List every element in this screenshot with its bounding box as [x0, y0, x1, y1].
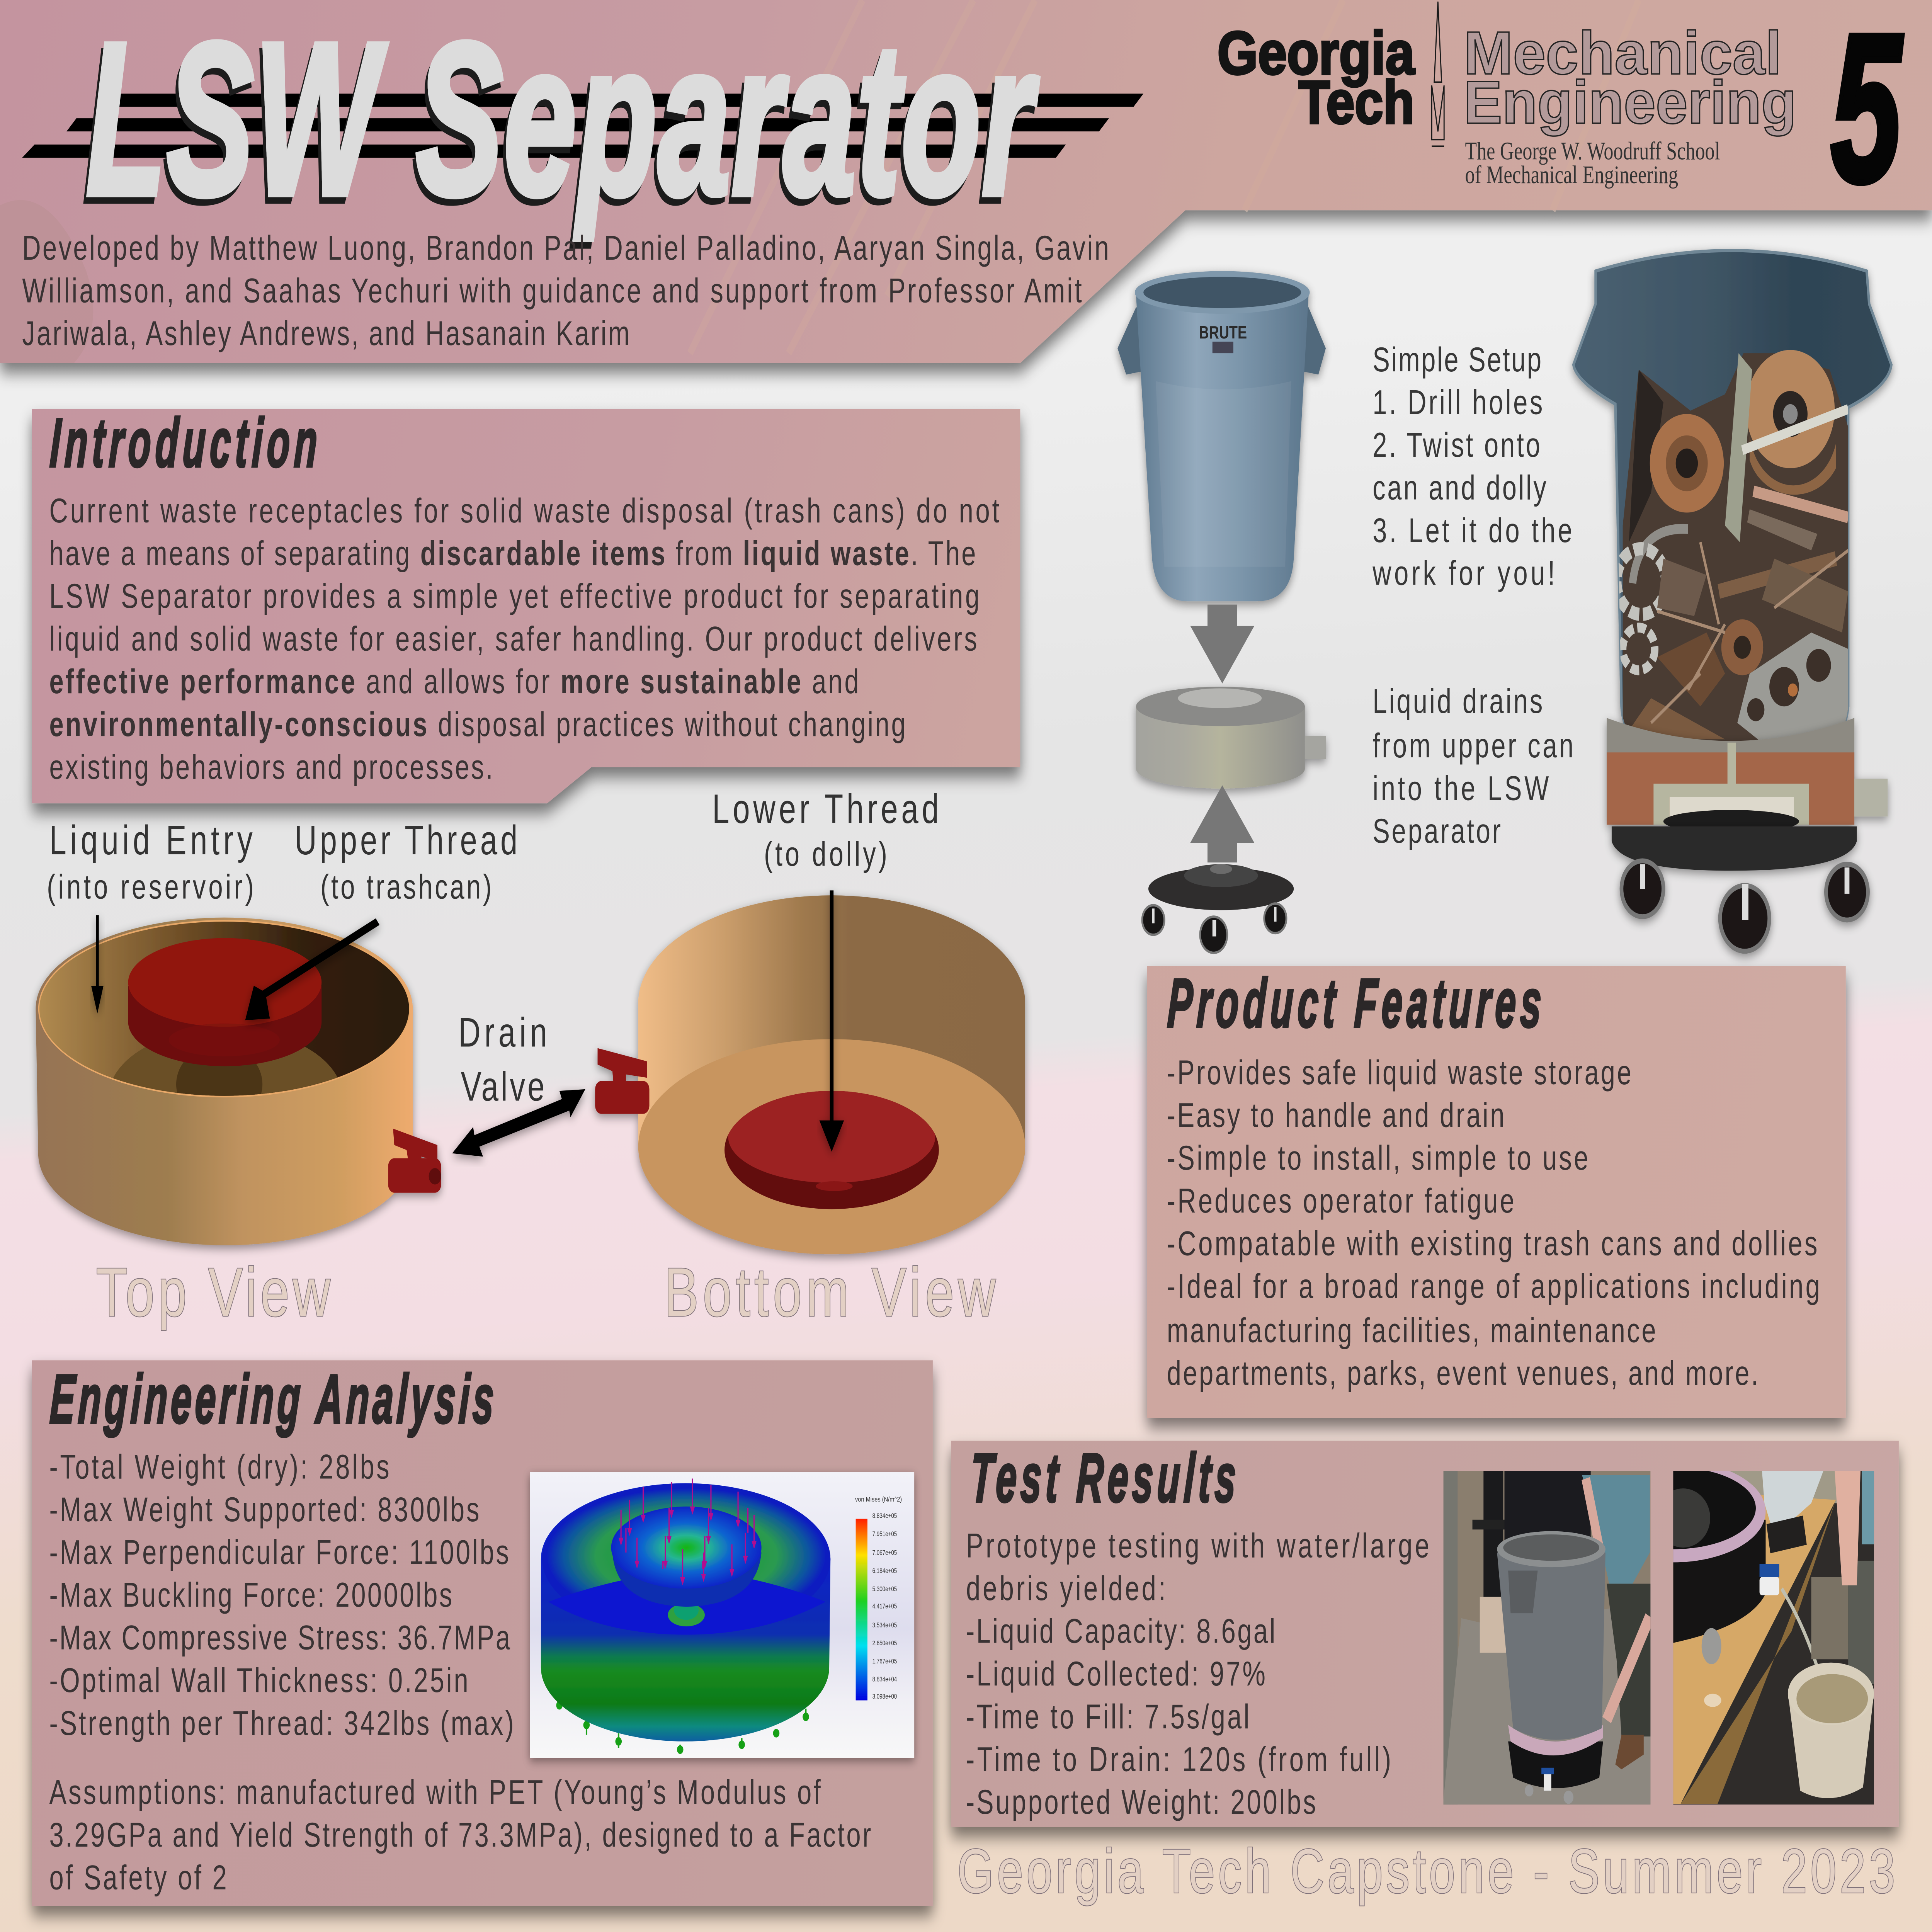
arrow: up into separator [1190, 785, 1254, 862]
exploded assembly [1117, 271, 1326, 953]
photo: prototype on floor [1443, 1470, 1651, 1806]
logo: Georgia Tech Mechanical Engineering: Engineering [1464, 68, 1796, 136]
logo: Georgia Tech Mechanical Engineering: Georgia [1218, 19, 1415, 87]
introduction text [49, 492, 999, 786]
panel: engineering analysis [32, 1360, 933, 1906]
introduction text: have a means of separating discardable items from liquid waste. The [49, 534, 976, 573]
drainage description: into the LSW [1372, 769, 1549, 808]
analysis list: -Max Buckling Force: 20000lbs [49, 1576, 452, 1614]
arrow: drain valve [452, 1089, 585, 1156]
drainage description: Separator [1372, 812, 1501, 850]
separator on table [1673, 1520, 1766, 1643]
scrap metal [1617, 350, 1848, 743]
logo: Georgia Tech Mechanical Engineering [1218, 2, 1796, 189]
assumptions text: Assumptions: manufactured with PET (Young’s Modulus of [49, 1773, 821, 1811]
results list: -Liquid Capacity: 8.6gal [966, 1612, 1275, 1650]
setup instructions: work for you! [1372, 554, 1555, 592]
trash can: BRUTE [1199, 322, 1247, 342]
stress legend: 3.098e+00 [872, 1693, 897, 1701]
heading: engineering analysis: Engineering Analysis [49, 1361, 495, 1438]
heading: introduction: Introduction [49, 405, 319, 481]
assumptions text [49, 1773, 871, 1897]
assumptions text: 3.29GPa and Yield Strength of 73.3MPa), designed to a Factor [49, 1816, 871, 1854]
analysis list: -Max Weight Supported: 8300lbs [49, 1490, 479, 1529]
results list: -Supported Weight: 200lbs [966, 1783, 1316, 1821]
results list [966, 1526, 1429, 1821]
logo: Georgia Tech Mechanical Engineering: of Mechanical Engineering [1465, 160, 1678, 189]
features list: -Provides safe liquid waste storage [1167, 1053, 1631, 1092]
part labels [47, 786, 939, 1109]
stress legend: von Mises (N/m^2) [855, 1496, 902, 1503]
analysis list: -Max Perpendicular Force: 1100lbs [49, 1533, 509, 1571]
separator section [1607, 718, 1888, 833]
stress analysis figure [530, 1472, 914, 1758]
setup instructions: can and dolly [1372, 468, 1546, 507]
drainage description: Liquid drains [1372, 682, 1543, 720]
introduction text: LSW Separator provides a simple yet effective product for separating [49, 577, 980, 615]
analysis list: -Strength per Thread: 342lbs (max) [49, 1704, 514, 1742]
view captions: Top View [96, 1254, 330, 1331]
part labels: Upper Thread [294, 817, 517, 863]
stress legend: 2.650e+05 [872, 1639, 897, 1647]
stress legend: 5.300e+05 [872, 1585, 897, 1593]
separator gray [1136, 687, 1326, 789]
photo: draining liquid [1581, 1461, 1874, 1806]
results list: debris yielded: [966, 1569, 1166, 1607]
panel: introduction [32, 405, 1020, 803]
introduction text: environmentally-conscious disposal practices without changing [49, 705, 906, 743]
view captions [96, 1254, 996, 1331]
logo: Georgia Tech Mechanical Engineering: The George W. Woodruff School [1465, 137, 1720, 165]
features list: -Compatable with existing trash cans and dollies [1167, 1224, 1817, 1263]
title with stripes [22, 0, 1143, 241]
analysis list [49, 1447, 514, 1742]
features list: -Simple to install, simple to use [1167, 1139, 1588, 1177]
features list: manufacturing facilities, maintenance [1167, 1311, 1656, 1350]
stress cylinder [541, 1483, 830, 1742]
drainage description: from upper can [1372, 726, 1573, 765]
introduction text: liquid and solid waste for easier, safer handling. Our product delivers [49, 619, 977, 658]
panel: product features [1147, 965, 1846, 1418]
drainage description [1372, 682, 1573, 850]
dolly small [1142, 864, 1294, 953]
setup instructions [1372, 340, 1572, 592]
person [1582, 1475, 1650, 1584]
setup instructions: 2. Twist onto [1372, 426, 1540, 464]
results list: -Time to Drain: 120s (from full) [966, 1740, 1391, 1779]
part labels: (to trashcan) [320, 867, 492, 906]
logo: Georgia Tech Mechanical Engineering: Tech [1299, 68, 1415, 136]
can shell [1573, 250, 1891, 743]
features list: -Easy to handle and drain [1167, 1096, 1504, 1134]
arrow: lower thread [820, 890, 844, 1151]
credits text: Developed by Matthew Luong, Brandon Pal, Daniel Palladino, Aaryan Singla, Gavin [22, 228, 1109, 267]
base [1508, 1742, 1603, 1788]
part labels: Liquid Entry [49, 817, 253, 863]
features list: -Ideal for a broad range of applications including [1167, 1267, 1820, 1305]
trash can [1117, 271, 1326, 601]
stress legend: 7.067e+05 [872, 1549, 897, 1557]
credits text: Jariwala, Ashley Andrews, and Hasanain Karim [22, 314, 629, 352]
arrow: down into separator [1190, 605, 1254, 684]
part labels: Lower Thread [712, 786, 939, 832]
stress legend: 7.951e+05 [872, 1531, 897, 1538]
stress legend: 6.184e+05 [872, 1567, 897, 1575]
results list: -Time to Fill: 7.5s/gal [966, 1697, 1249, 1736]
arrow: upper thread [245, 918, 379, 1020]
analysis list: -Optimal Wall Thickness: 0.25in [49, 1661, 468, 1699]
part labels: Drain [458, 1009, 547, 1055]
credits text: Williamson, and Saahas Yechuri with guidance and support from Professor Amit [22, 271, 1082, 310]
restraint markers [557, 1696, 808, 1753]
top view of separator [36, 918, 441, 1245]
part labels: (to dolly) [764, 835, 887, 873]
features list [1167, 1053, 1820, 1392]
drain valve [388, 1129, 441, 1193]
setup instructions: Simple Setup [1372, 340, 1541, 379]
bucket [1788, 1692, 1874, 1798]
stress legend: 8.834e+04 [872, 1676, 897, 1683]
red center thread [128, 938, 321, 1066]
introduction text: effective performance and allows for more sustainable and [49, 662, 859, 701]
drain valve [595, 1048, 649, 1114]
stress legend [855, 1496, 902, 1701]
stress legend: 1.767e+05 [872, 1658, 897, 1665]
results list: -Liquid Collected: 97% [966, 1655, 1265, 1693]
part labels: Valve [461, 1063, 544, 1109]
introduction text: Current waste receptacles for solid waste disposal (trash cans) do not [49, 492, 999, 530]
features list: -Reduces operator fatigue [1167, 1181, 1514, 1220]
title stripes [22, 94, 1143, 158]
heading: product features: Product Features [1166, 965, 1543, 1042]
credits text [22, 228, 1109, 352]
header band [0, 0, 1932, 363]
introduction text: existing behaviors and processes. [49, 748, 493, 786]
load arrows [621, 1479, 754, 1577]
arrow: liquid entry [91, 915, 104, 1014]
stress legend: 8.834e+05 [872, 1512, 897, 1520]
heading: test results: Test Results [969, 1440, 1237, 1517]
logo: Georgia Tech Mechanical Engineering: Mechanical [1464, 19, 1782, 87]
part labels: (into reservoir) [47, 867, 254, 906]
title text: LSW Separator [86, 0, 1039, 241]
person [1848, 1561, 1874, 1684]
setup instructions: 3. Let it do the [1372, 511, 1572, 549]
dolly large [1612, 827, 1868, 951]
setup instructions: 1. Drill holes [1372, 383, 1543, 422]
analysis list: -Total Weight (dry): 28lbs [49, 1447, 389, 1486]
cross-section of can with scrap [1573, 250, 1891, 951]
view captions: Bottom View [664, 1254, 996, 1331]
logo spire [1432, 2, 1444, 146]
footer caption: Georgia Tech Capstone - Summer 2023 [957, 1837, 1895, 1906]
stress legend: 3.534e+05 [872, 1622, 897, 1629]
trash can [1497, 1553, 1605, 1740]
bottom view of separator [595, 895, 1025, 1254]
panel: test results [951, 1440, 1899, 1827]
features list: departments, parks, event venues, and more. [1167, 1354, 1758, 1392]
results list: Prototype testing with water/large [966, 1526, 1429, 1565]
assumptions text: of Safety of 2 [49, 1858, 227, 1897]
stress legend: 4.417e+05 [872, 1603, 897, 1610]
analysis list: -Max Compressive Stress: 36.7MPa [49, 1618, 510, 1657]
